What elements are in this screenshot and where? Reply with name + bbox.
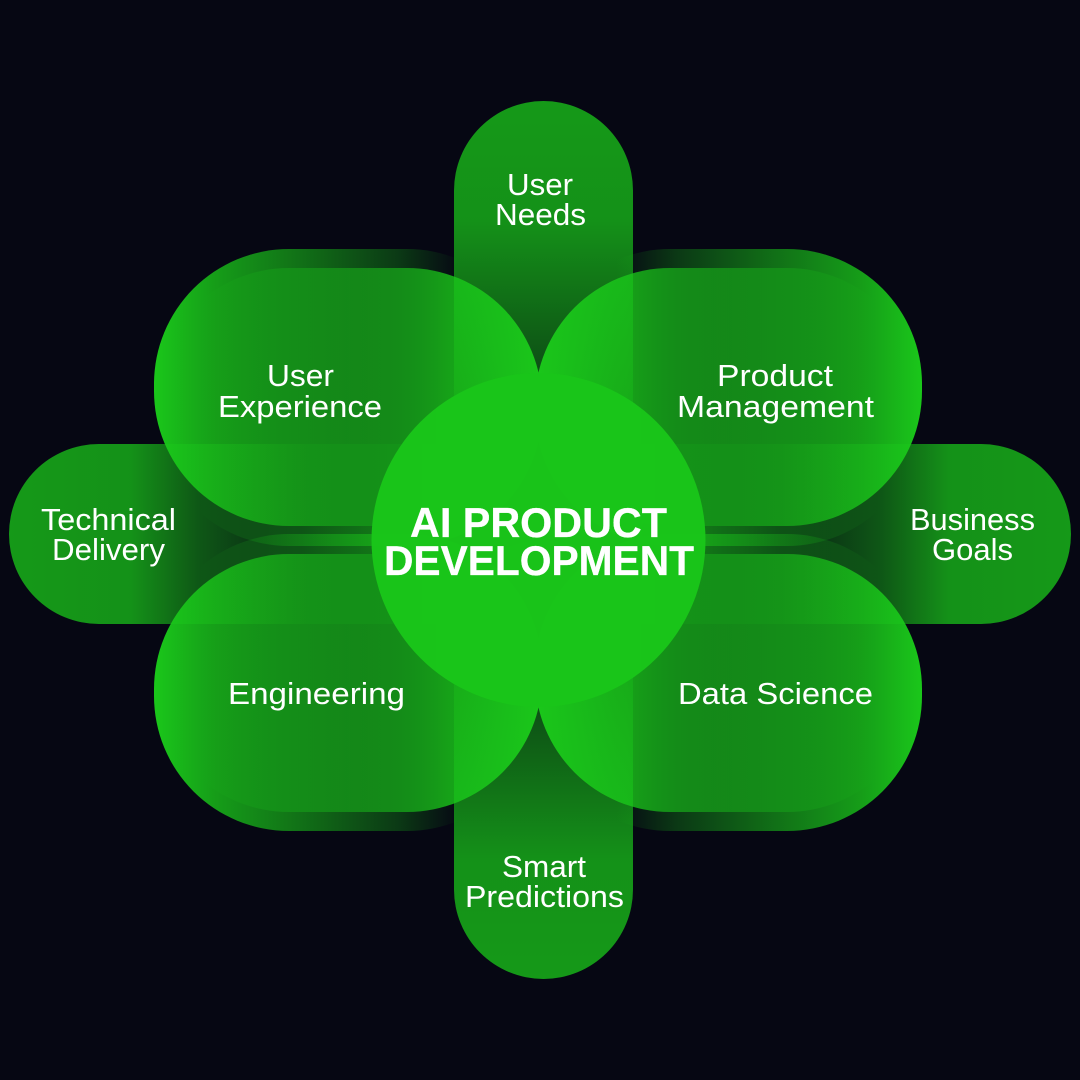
panel: Product Management <box>535 249 922 546</box>
pill: Technical Delivery: Delivery <box>52 532 166 567</box>
pill: Smart Predictions <box>454 540 633 979</box>
pill: Smart Predictions: Predictions <box>465 879 624 914</box>
center circle: AI Product Development: AI PRODUCT <box>410 499 667 546</box>
panel: Data Science <box>535 534 922 831</box>
center circle: AI Product Development <box>372 373 706 707</box>
panel: Product Management: Product <box>717 358 833 393</box>
pill: Business Goals: Goals <box>932 532 1013 567</box>
panel: Engineering: Engineering <box>228 676 405 711</box>
panel: Product Management: Management <box>677 389 874 424</box>
pill: Technical Delivery <box>9 444 540 624</box>
pill: Business Goals: Business <box>910 502 1035 537</box>
center circle: AI Product Development: DEVELOPMENT <box>384 537 694 584</box>
pill: User Needs: Needs <box>495 197 586 232</box>
pill: User Needs: User <box>507 167 573 202</box>
pill: Smart Predictions: Smart <box>502 849 586 884</box>
panel: User Experience: User <box>267 358 334 393</box>
panel: Data Science: Data Science <box>678 676 873 711</box>
pill: Technical Delivery: Technical <box>41 502 176 537</box>
panel: User Experience: Experience <box>218 389 382 424</box>
panel: User Experience <box>154 249 542 546</box>
pill: Business Goals <box>540 444 1071 624</box>
panel: Engineering <box>154 534 542 831</box>
pill: User Needs <box>454 101 633 540</box>
